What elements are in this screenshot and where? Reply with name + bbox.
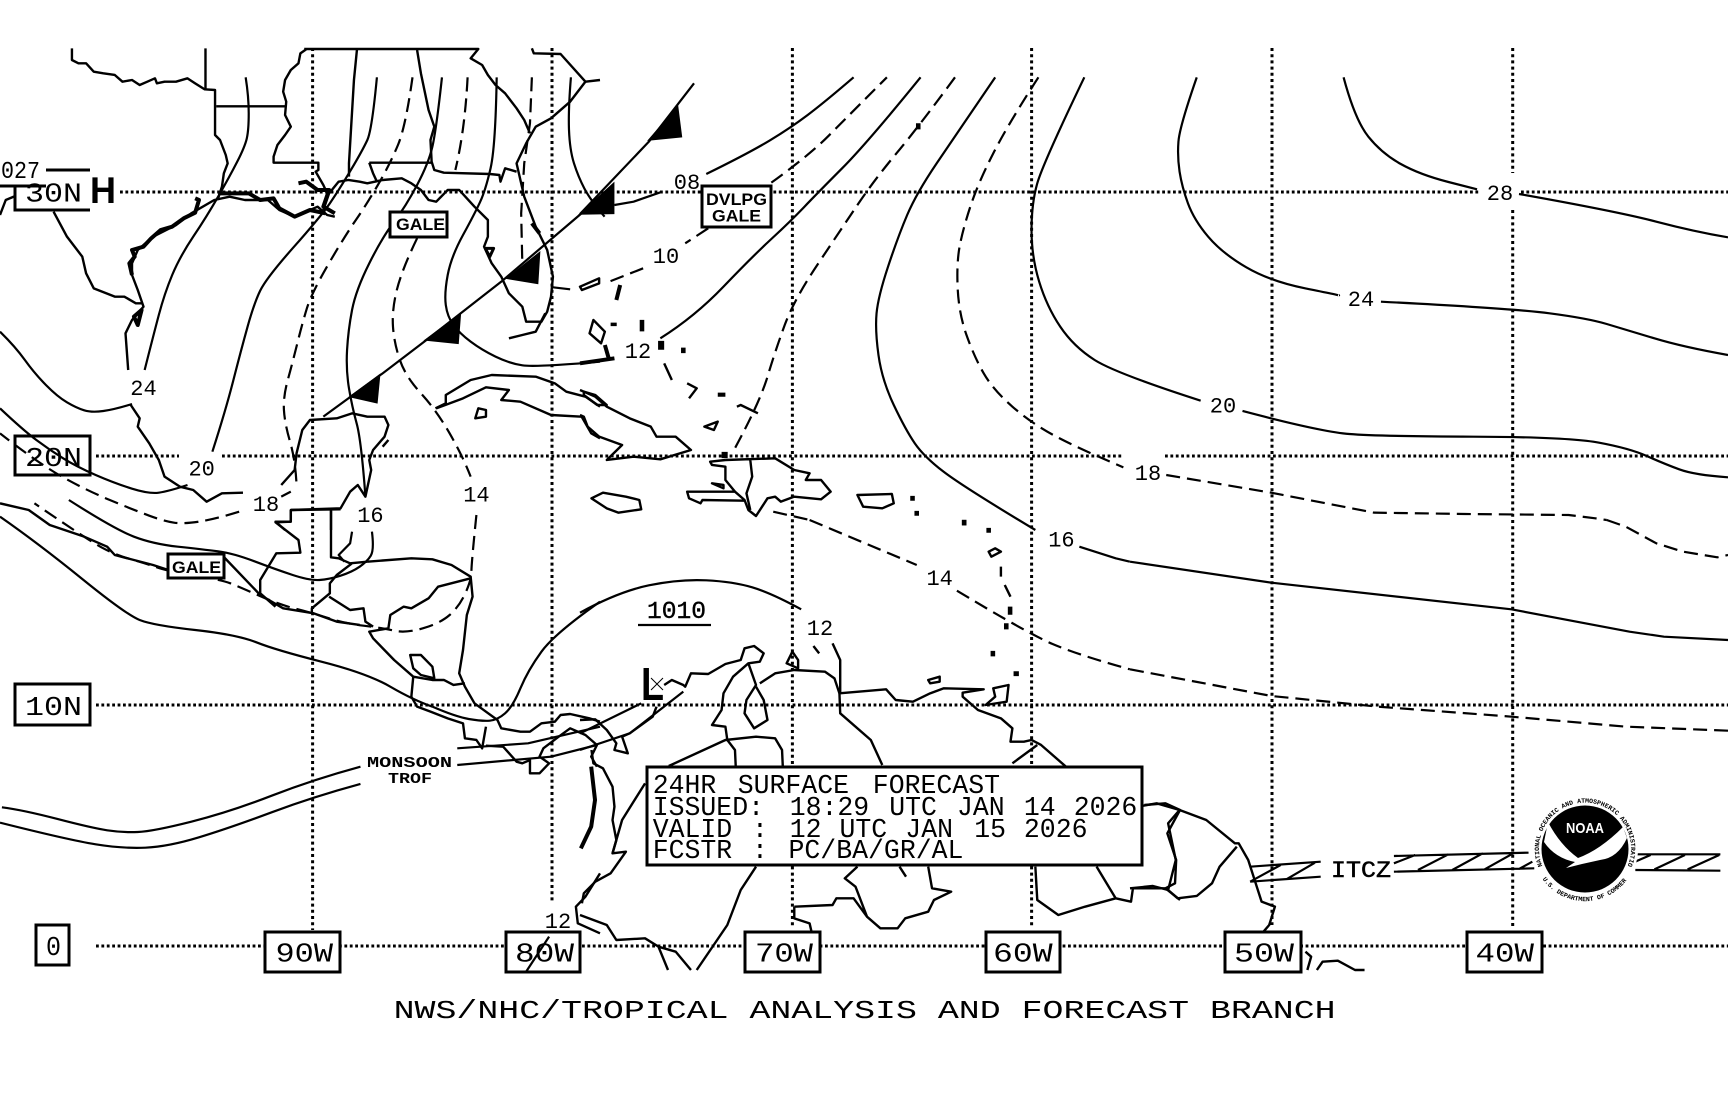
icon: NOAA logo: NOAA — [1566, 820, 1604, 837]
latitude label: 10N — [15, 684, 90, 725]
high pressure marker with 1027: H — [90, 170, 116, 211]
longitude label: 50W — [1225, 932, 1301, 972]
isobar value labels: 10 — [653, 245, 679, 270]
isobar value labels — [130, 171, 1513, 935]
latitude label: 30N: 30N — [25, 181, 82, 211]
isobar value labels: 28 — [1487, 182, 1513, 207]
longitude label: 90W: 90W — [276, 941, 334, 971]
gale warning: Gulf of Mexico — [390, 212, 447, 237]
developing gale warning: DVLPG — [706, 190, 767, 209]
forecast info box: : — [752, 836, 768, 866]
forecast info box: 2026 — [1074, 793, 1137, 823]
latitude label: 20N — [15, 436, 90, 475]
icon: NOAA logo: NATIONAL OCEANIC AND ATMOSPHERIC ADMINISTRATION — [1534, 798, 1636, 868]
label: monsoon trof — [367, 755, 452, 788]
isobar value labels: 08 — [674, 171, 700, 196]
forecast info box: SURFACE — [738, 771, 849, 801]
forecast info box: 18:29 — [790, 793, 869, 823]
land outlines — [0, 48, 1365, 970]
latitude label: 0 — [36, 925, 69, 965]
ITCZ hatched band — [1250, 853, 1720, 882]
isobar value labels: 16 — [357, 504, 384, 529]
isobar value labels: 14 — [926, 567, 953, 592]
forecast info box: FORECAST — [873, 771, 1000, 801]
isobar value labels: 20 — [188, 458, 215, 483]
label: monsoon trof: TROF — [388, 771, 432, 788]
longitude label: 60W: 60W — [993, 941, 1054, 971]
latitude label: 20N: 20N — [25, 445, 82, 475]
icon: NOAA logo — [1534, 798, 1638, 902]
isobar value labels: 12 — [807, 617, 833, 642]
trough: thick line near Colombia — [581, 767, 595, 848]
forecast info box: : — [752, 815, 768, 845]
isobar value labels: 18 — [253, 493, 279, 518]
gale warning: Gulf of Mexico: GALE — [396, 215, 445, 234]
forecast info box: 12 — [790, 815, 822, 845]
latitude label: 0: 0 — [46, 934, 61, 964]
label: ITCZ: ITCZ — [1331, 858, 1391, 884]
isobar value labels: 12 — [625, 340, 651, 365]
forecast info box: 14 — [1024, 793, 1056, 823]
developing gale warning — [702, 186, 771, 227]
forecast info box: FCSTR — [653, 836, 732, 866]
forecast info box: VALID — [653, 815, 732, 845]
longitude label: 40W: 40W — [1476, 941, 1535, 971]
developing gale warning: GALE — [712, 207, 761, 226]
icon: NOAA logo: U.S. DEPARTMENT OF COMMERCE — [1543, 876, 1626, 902]
longitude label: 80W: 80W — [515, 941, 575, 971]
latitude and longitude grid — [96, 48, 1728, 946]
isobar value labels: 20 — [1210, 395, 1236, 420]
low pressure marker with 1010 — [638, 599, 711, 710]
isobar value labels: 12 — [545, 910, 571, 935]
gale warning: Tehuantepec: GALE — [172, 558, 221, 577]
longitude label: 70W: 70W — [755, 941, 814, 971]
low pressure marker with 1010: L — [641, 658, 664, 710]
forecast info box: ISSUED: — [653, 793, 764, 823]
isobar value labels: 18 — [1135, 462, 1161, 487]
label: monsoon trof: MONSOON — [367, 755, 452, 772]
monsoon trough lines — [0, 692, 683, 848]
forecast info box: JAN — [957, 793, 1005, 823]
latitude label: 10N: 10N — [25, 694, 82, 724]
isobar value labels: 14 — [463, 484, 490, 509]
isobars: pressure contour lines — [0, 77, 1728, 731]
longitude label: 50W: 50W — [1234, 941, 1295, 971]
longitude label: 80W — [506, 932, 580, 972]
high pressure marker with 1027: 027 — [1, 159, 40, 186]
gale warning: Tehuantepec — [168, 554, 224, 578]
forecast info box: JAN — [905, 815, 953, 845]
longitude label: 60W — [986, 932, 1060, 972]
longitude label: 40W — [1467, 932, 1542, 972]
high pressure marker with 1027 — [1, 159, 116, 211]
forecast info box — [647, 767, 1142, 866]
longitude label: 90W — [265, 932, 340, 972]
forecast info box: UTC — [840, 815, 887, 845]
footer credit: NWS/NHC/TROPICAL ANALYSIS AND FORECAST BRANCH — [394, 996, 1336, 1026]
forecast info box: 2026 — [1024, 815, 1088, 845]
forecast info box: PC/BA/GR/AL — [788, 836, 963, 866]
isobar value labels: 24 — [1348, 288, 1374, 313]
low pressure marker with 1010: 1010 — [647, 599, 706, 626]
cold front with triangular pips — [323, 83, 694, 417]
forecast info box: 24HR — [653, 771, 716, 801]
forecast info box: 15 — [974, 815, 1006, 845]
forecast info box: UTC — [889, 793, 937, 823]
longitude label: 70W — [745, 932, 820, 972]
isobar value labels: 24 — [130, 377, 157, 402]
latitude label: 30N — [0, 170, 90, 211]
isobar value labels: 16 — [1048, 529, 1075, 554]
